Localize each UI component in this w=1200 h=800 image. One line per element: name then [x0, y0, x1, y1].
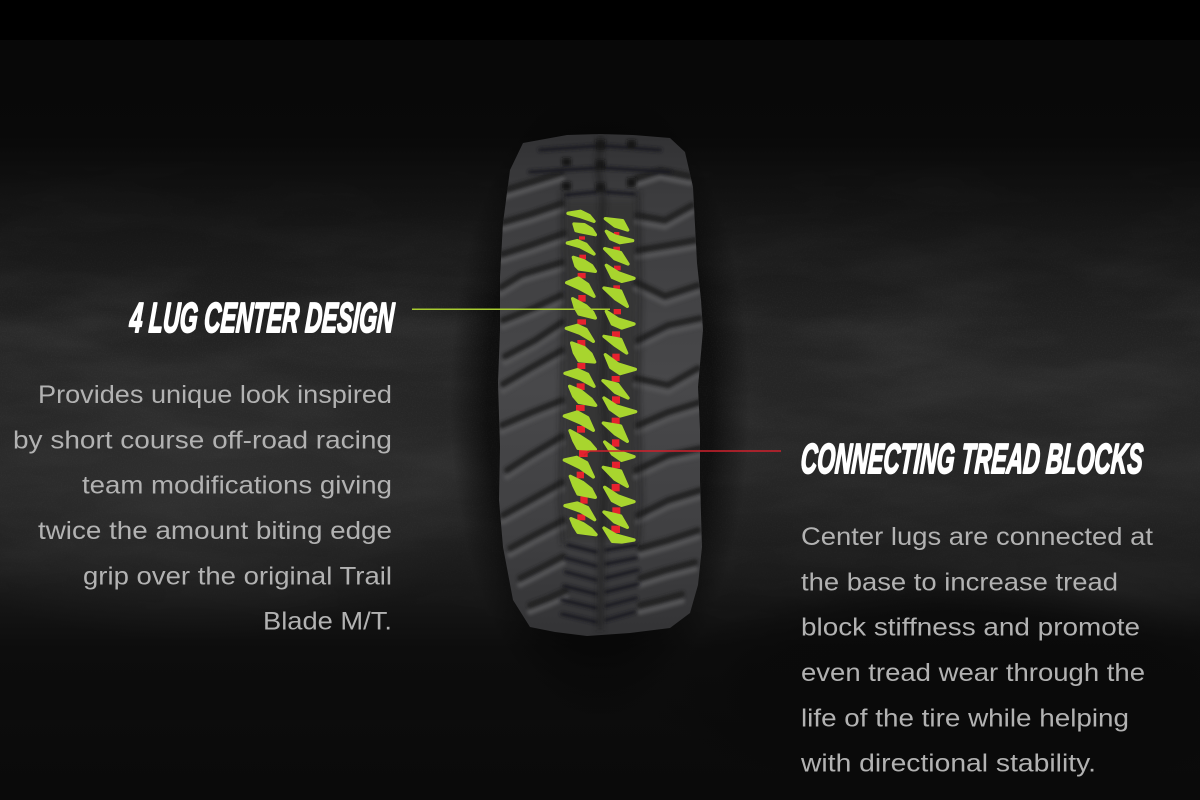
- heading: 4 lug center design: 4 LUG CENTER DESIGN: [128, 294, 397, 341]
- tread dark channels: [560, 135, 641, 630]
- body text: left: [13, 381, 392, 636]
- body text: left: twice the amount biting edge: [38, 517, 392, 545]
- body text: left: Provides unique look inspired: [38, 381, 392, 409]
- right callout: connecting tread blocks: [799, 435, 1153, 778]
- body text: right: block stiffness and promote: [801, 614, 1140, 642]
- center tread zone: [566, 200, 636, 540]
- body text: right: [800, 523, 1153, 778]
- background: dark smoke: [0, 178, 1200, 630]
- red connecting blocks: [576, 232, 621, 533]
- top black bar: [0, 0, 1200, 40]
- connector line: red: [584, 451, 781, 455]
- body text: left: Blade M/T.: [263, 608, 392, 636]
- left callout: 4 lug center design: [13, 294, 397, 636]
- green center lugs: [564, 211, 636, 542]
- body text: left: by short course off-road racing: [13, 426, 392, 454]
- body text: right: the base to increase tread: [801, 568, 1118, 596]
- body text: left: team modifications giving: [82, 472, 392, 500]
- shoulder grooves: [501, 170, 700, 605]
- connector line: green: [412, 308, 610, 310]
- top and bottom tread: [530, 140, 670, 622]
- shoulder highlights: [501, 177, 700, 612]
- body text: right: with directional stability.: [800, 750, 1096, 778]
- body text: right: Center lugs are connected at: [801, 523, 1153, 551]
- tire: [498, 134, 703, 636]
- body text: right: even tread wear through the: [801, 659, 1145, 687]
- tire body: [498, 134, 703, 636]
- body text: right: life of the tire while helping: [801, 704, 1129, 732]
- body text: left: grip over the original Trail: [83, 562, 392, 590]
